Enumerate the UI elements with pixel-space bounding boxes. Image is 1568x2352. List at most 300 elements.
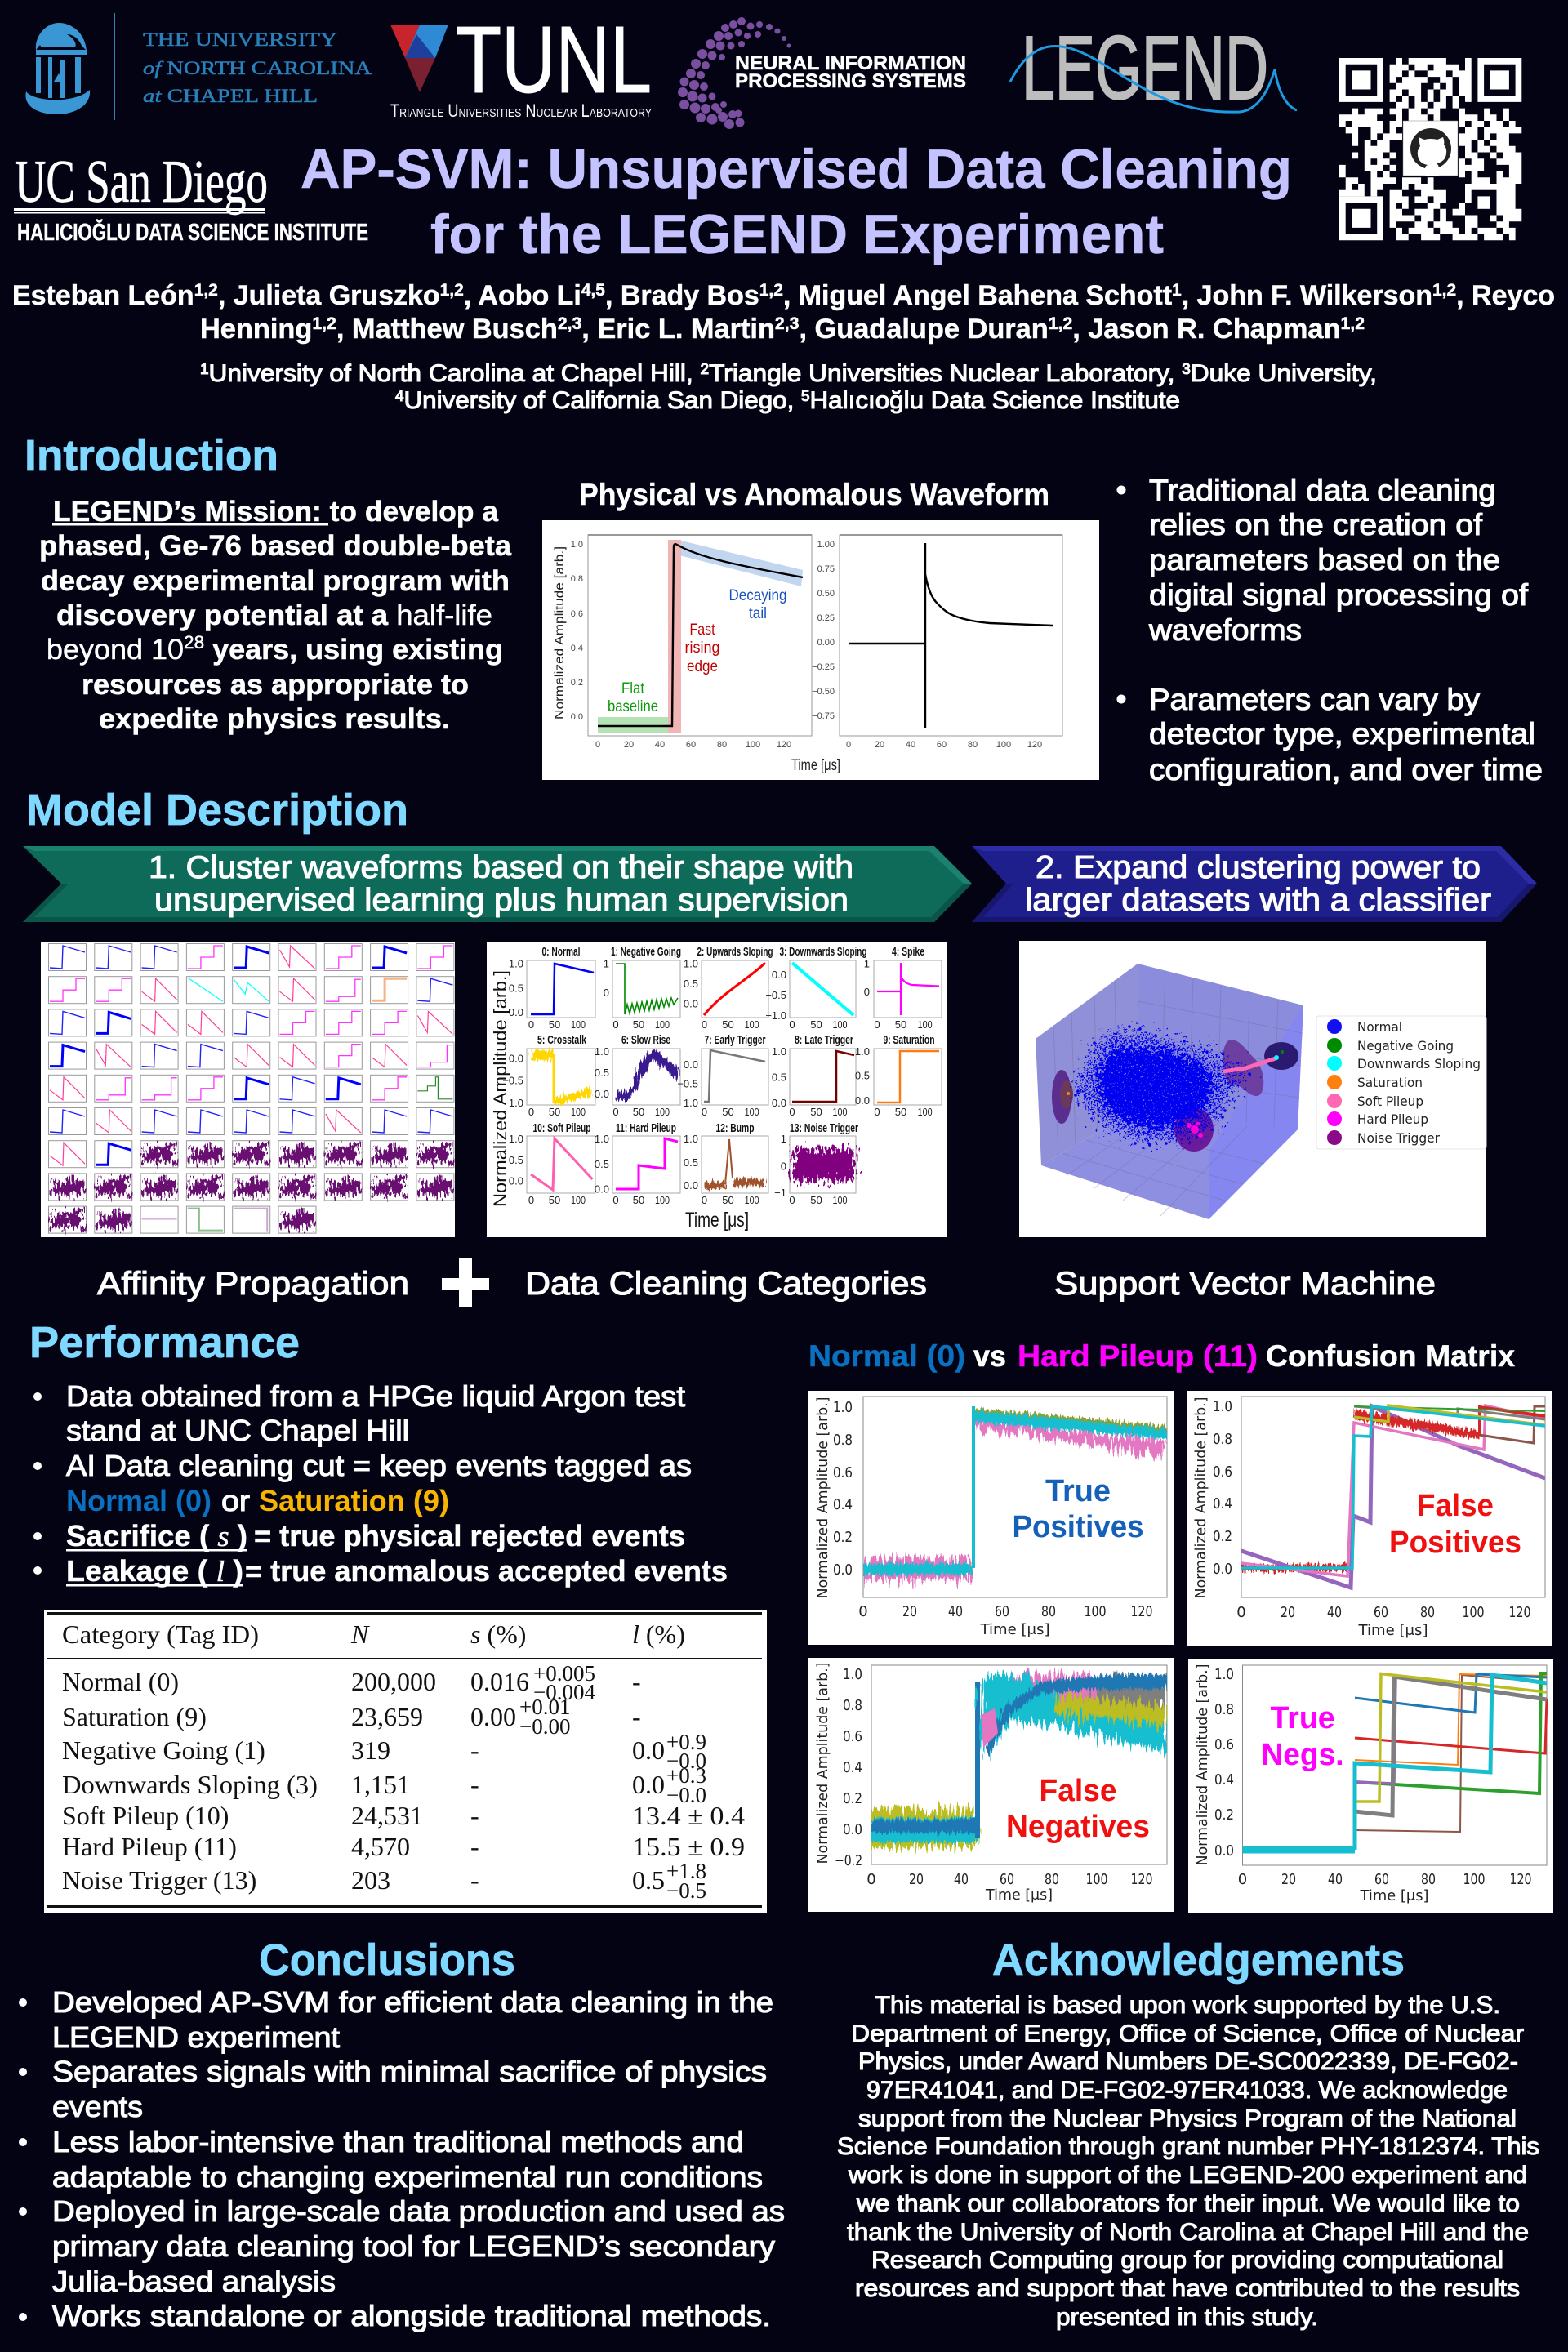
plot: physical waveform: 80	[717, 740, 727, 750]
plot: anomalous waveform	[812, 534, 1062, 750]
ribbon 1: cluster waveforms: 1. Cluster waveforms based on their shape with	[149, 850, 853, 885]
panel: data cleaning categories: 0.0	[684, 1179, 698, 1192]
plot: anomalous waveform: 0.75	[817, 564, 835, 574]
category titles	[532, 945, 934, 1135]
ribbon 1: cluster waveforms: unsupervised learning plus human supervision	[154, 883, 849, 918]
category tick labels: 100	[833, 1106, 848, 1118]
heading: Introduction: Introduction	[24, 431, 278, 480]
category titles: 8: Late Trigger	[795, 1033, 853, 1047]
category tick labels: 100	[745, 1106, 760, 1118]
panel: data cleaning categories: 1.0	[595, 1045, 609, 1058]
3D box	[1036, 964, 1303, 1219]
panel: data cleaning categories: 0.0	[855, 1094, 870, 1107]
axis labels: 100	[1463, 1871, 1485, 1888]
panel: data cleaning categories: 0.0	[509, 1052, 523, 1065]
axis labels: 0.4	[1214, 1771, 1234, 1788]
axis labels: −0.2	[835, 1852, 862, 1869]
category tick labels	[528, 1018, 933, 1206]
logo: LEGEND: LEGEND	[1022, 18, 1268, 118]
authors: , Matthew Busch	[336, 314, 558, 345]
scatter: normal events	[1074, 1025, 1251, 1147]
category titles: 9: Saturation	[884, 1033, 934, 1047]
category tick labels: 0	[702, 1106, 707, 1118]
text block: acknowledgements: presented in this study.	[1056, 2304, 1318, 2331]
scatter: pileup events	[1067, 1050, 1284, 1138]
authors: , Julieta Gruszko	[218, 280, 440, 311]
plot: physical waveform: Fast	[689, 621, 715, 639]
table rows: -	[470, 1832, 479, 1861]
axis labels: 1.0	[833, 1399, 853, 1416]
affiliations: Triangle Universities Nuclear Laboratory,	[709, 360, 1182, 387]
text block: LEGEND's Mission: years, using existing	[204, 634, 503, 666]
category titles: 13: Noise Trigger	[790, 1121, 858, 1135]
bullets: performance definitions: Normal (0)	[66, 1484, 212, 1517]
category tick labels: 0	[528, 1106, 534, 1118]
axis labels: 0	[866, 1871, 876, 1888]
axis labels: 0.8	[1213, 1431, 1232, 1448]
table rows: −0.004	[533, 1680, 595, 1704]
axis labels: 100	[1462, 1604, 1485, 1621]
category tick labels: 100	[918, 1106, 933, 1118]
plot: anomalous waveform: 40	[906, 740, 915, 750]
category tick labels: 0	[789, 1194, 795, 1206]
panel: data cleaning categories: 0.5	[595, 1067, 609, 1079]
category titles: 1: Negative Going	[611, 945, 681, 959]
authors: 1,2	[1341, 314, 1365, 333]
legend: Downwards Sloping	[1357, 1056, 1481, 1071]
plot: anomalous waveform: −0.50	[812, 687, 835, 697]
title	[301, 138, 1292, 265]
plot: physical waveform: 0.6	[571, 609, 583, 619]
category tick labels: 50	[810, 1194, 822, 1206]
category tick labels: 50	[895, 1018, 906, 1031]
confusion matrix heading: Hard Pileup (11)	[1018, 1339, 1258, 1373]
axis labels	[814, 1663, 1153, 1904]
panel: data cleaning categories: 1	[864, 958, 870, 970]
category tick labels: 100	[918, 1018, 933, 1031]
text block: acknowledgements: support from the Nuclear Physics Program of the National	[858, 2105, 1517, 2132]
text block: LEGEND's Mission: 28	[184, 632, 204, 653]
axis labels: 40	[948, 1603, 963, 1620]
table rows: 23,659	[351, 1702, 423, 1731]
authors: 1	[1172, 281, 1182, 300]
axis labels: 80	[1045, 1871, 1059, 1888]
panel: data cleaning categories: 0	[781, 1160, 786, 1173]
bullets: conclusions: LEGEND experiment	[52, 2020, 340, 2054]
axis labels: 1.0	[1213, 1398, 1232, 1415]
affiliations: 5	[801, 388, 810, 404]
panel: data cleaning categories: −0.5	[502, 1075, 523, 1087]
legend: Soft Pileup	[1357, 1094, 1423, 1109]
affiliations: 2	[701, 361, 709, 377]
axis labels	[1194, 1664, 1532, 1904]
table rows: +0.01	[519, 1695, 570, 1719]
bullets: traditional data cleaning: Traditional data cleaning	[1149, 474, 1496, 507]
authors: , Eric L. Martin	[581, 314, 775, 345]
category tick labels: 50	[549, 1018, 560, 1031]
axis labels: 0	[858, 1603, 868, 1620]
axis labels: Normalized Amplitude [arb.]	[814, 1663, 831, 1864]
category tick labels: 100	[655, 1194, 670, 1206]
table rows: 0.0	[632, 1735, 665, 1765]
axis labels: 20	[909, 1871, 924, 1888]
authors: , John F. Wilkerson	[1182, 280, 1432, 311]
category tick labels: 0	[612, 1106, 619, 1118]
panel: data cleaning categories: 0.5	[509, 982, 523, 994]
QR code with GitHub logo	[1339, 58, 1521, 240]
axis labels: 60	[1374, 1604, 1388, 1621]
caption: Support Vector Machine: Support Vector Machine	[1054, 1266, 1436, 1302]
bullets: conclusions: Developed AP-SVM for efficient data cleaning in the	[52, 1985, 773, 2019]
bullets: conclusions: Less labor-intensive than traditional methods and	[52, 2125, 744, 2158]
affiliations: University of California San Diego,	[403, 387, 801, 414]
category tick labels: 50	[633, 1018, 644, 1031]
plot frames	[527, 960, 942, 1193]
category tick labels: 100	[655, 1018, 670, 1031]
category tick labels: 50	[722, 1106, 734, 1118]
axis labels: 120	[1130, 1603, 1153, 1620]
table rows: Negative Going (1)	[62, 1735, 265, 1765]
title: AP-SVM: Unsupervised Data Cleaning	[301, 138, 1292, 200]
table rows: 203	[351, 1865, 390, 1895]
bullets: performance definitions: Saturation (9)	[259, 1484, 449, 1517]
panel: false positives: Positives	[1389, 1526, 1521, 1560]
category tick labels: 50	[549, 1194, 560, 1206]
bullets: traditional data cleaning: parameters based on the	[1149, 543, 1500, 577]
plot: physical waveform: 0	[595, 740, 600, 750]
axis labels	[1192, 1396, 1530, 1639]
panel: data cleaning categories: 0.0	[509, 1175, 523, 1187]
plot: anomalous waveform: 0.50	[817, 589, 835, 599]
category titles: 6: Slow Rise	[621, 1033, 670, 1047]
axis labels: 0.8	[843, 1697, 862, 1714]
authors	[12, 280, 1555, 345]
confusion matrix heading	[808, 1339, 1515, 1373]
legend: Saturation	[1357, 1075, 1423, 1090]
confusion matrix heading: Confusion Matrix	[1266, 1339, 1515, 1373]
chart: physical and anomalous waveforms: Time [μs]	[791, 757, 840, 774]
authors: , Jason R. Chapman	[1072, 314, 1341, 345]
table rows: +0.9	[666, 1730, 706, 1754]
panel: data cleaning categories: 0.0	[684, 1058, 698, 1071]
bullets: performance definitions: AI Data cleaning cut = keep events tagged as	[66, 1449, 692, 1482]
axis labels: 60	[995, 1603, 1009, 1620]
axis labels: 20	[902, 1603, 917, 1620]
affiliations: 3	[1182, 361, 1191, 377]
logo: Neural Information Processing Systems: PROCESSING SYSTEMS	[735, 70, 966, 92]
panel: data cleaning categories: 1.0	[684, 1133, 698, 1145]
panel: true positives: True	[1045, 1474, 1111, 1508]
table rows: Soft Pileup (10)	[62, 1801, 229, 1830]
axis labels: 0.2	[833, 1529, 853, 1546]
category tick labels: 50	[633, 1106, 644, 1118]
text block: acknowledgements: resources and support that have contributed to the results	[855, 2275, 1520, 2302]
axis labels: 0.0	[833, 1561, 853, 1579]
bullets: conclusions: Deployed in large-scale data production and used as	[52, 2194, 785, 2228]
plot: physical waveform: rising	[684, 639, 720, 657]
waveform traces	[1241, 1405, 1545, 1588]
table rows: 0.0	[632, 1770, 665, 1799]
panel: false negatives	[808, 1658, 1174, 1912]
axis labels: 100	[1085, 1603, 1106, 1620]
category tick labels: 50	[722, 1194, 734, 1206]
results table	[44, 1610, 767, 1913]
axis labels: 0.8	[1214, 1701, 1234, 1718]
plot: physical waveform: edge	[687, 658, 718, 675]
axis labels: 40	[1328, 1871, 1343, 1888]
panel: affinity propagation waveform grid	[41, 942, 455, 1237]
logo: TUNL: Triangle Universities Nuclear Laboratory	[390, 100, 652, 121]
axis labels: 0.0	[1214, 1842, 1234, 1860]
table rows: 24,531	[351, 1801, 423, 1830]
authors: 2,3	[558, 314, 581, 333]
panel: data cleaning categories: 1.0	[684, 958, 698, 970]
panel: data cleaning categories: 1.0	[595, 1133, 609, 1145]
title: for the LEGEND Experiment	[430, 203, 1164, 265]
axis labels: 0.2	[1213, 1528, 1232, 1545]
table rows: Saturation (9)	[62, 1702, 207, 1731]
authors: , Miguel Angel Bahena Schott	[783, 280, 1172, 311]
authors: 1,2	[440, 281, 464, 300]
panel: true negatives: True	[1271, 1701, 1334, 1735]
text block: acknowledgements: work is done in support of the LEGEND-200 experiment and	[848, 2162, 1527, 2189]
category titles: 12: Bump	[715, 1121, 755, 1135]
bullets: conclusions: adaptable to changing experimental run conditions	[52, 2160, 763, 2194]
authors: 1,2	[194, 281, 218, 300]
category tick labels: 100	[833, 1018, 848, 1031]
axis labels: 0	[1238, 1871, 1247, 1888]
axis labels: 0.4	[843, 1759, 862, 1776]
table header: l (%)	[632, 1619, 685, 1649]
logo: University of North Carolina: THE UNIVERSITY	[143, 29, 337, 50]
panel: data cleaning categories: 1	[781, 1133, 786, 1145]
category titles: 5: Crosstalk	[537, 1033, 586, 1047]
affiliations: Halıcıoğlu Data Science Institute	[810, 387, 1180, 414]
logo: TUNL: TUNL	[456, 7, 652, 113]
table rows: Noise Trigger (13)	[62, 1865, 256, 1895]
bullets: performance definitions	[33, 1379, 728, 1588]
affiliations: Duke University,	[1191, 360, 1377, 387]
plot: anomalous waveform: 1.00	[817, 540, 835, 550]
panel: data cleaning categories: 1.0	[509, 1133, 523, 1145]
bullets: traditional data cleaning: Parameters can vary by	[1149, 683, 1481, 716]
ribbon 2: expand clustering: larger datasets with a classifier	[1025, 883, 1491, 918]
table rows: 4,570	[351, 1832, 410, 1861]
panel: data cleaning categories: −0.5	[677, 1078, 698, 1089]
panel: data cleaning categories: 0.5	[684, 1156, 698, 1169]
panel: data cleaning categories: 0.5	[595, 1158, 609, 1170]
panel: data cleaning categories: 0.0	[595, 1088, 609, 1100]
authors: Henning	[200, 314, 311, 345]
axis labels: 0.6	[833, 1464, 853, 1481]
authors: 1,2	[760, 281, 783, 300]
panel: false negatives: Negatives	[1006, 1810, 1150, 1844]
confusion matrix heading: Normal (0)	[808, 1339, 965, 1373]
axis labels: Time [μs]	[1360, 1887, 1429, 1904]
panel: data cleaning categories: 0.5	[855, 1070, 870, 1082]
caption: Affinity Propagation: Affinity Propagation	[97, 1266, 409, 1302]
plot: anomalous waveform: 0.00	[817, 638, 835, 648]
panel: data cleaning categories: Normalized Amplitude [arb.]	[490, 970, 510, 1207]
category tick labels: 50	[810, 1018, 822, 1031]
text block: acknowledgements	[837, 1992, 1539, 2331]
bullets: traditional data cleaning: detector type, experimental	[1149, 717, 1535, 751]
category tick labels: 50	[633, 1194, 644, 1206]
category tick labels: 100	[571, 1018, 586, 1031]
category tick labels: 0	[702, 1018, 707, 1031]
ribbon 2: expand clustering	[972, 846, 1537, 922]
plot: physical waveform: 120	[777, 740, 791, 750]
table rows: 15.5 ± 0.9	[632, 1832, 745, 1861]
panel: data cleaning categories: 0.0	[509, 1006, 523, 1018]
table rows: -	[470, 1770, 479, 1799]
category titles: 3: Downwards Sloping	[779, 945, 867, 959]
axis labels: 0.2	[843, 1790, 862, 1807]
category titles: 11: Hard Pileup	[616, 1121, 676, 1135]
category titles: 4: Spike	[892, 945, 924, 959]
table rows: -	[470, 1735, 479, 1765]
text block: LEGEND's Mission: discovery potential at a half-life	[56, 599, 492, 631]
logo: UC San Diego Halicioglu Data Science Institute: UC San Diego	[15, 149, 268, 216]
plot: anomalous waveform: 80	[968, 740, 978, 750]
affiliations: 1	[200, 361, 209, 377]
text block: LEGEND's Mission: beyond 10	[47, 634, 184, 666]
heading: Acknowledgements: Acknowledgements	[992, 1936, 1405, 1984]
affiliations: University of North Carolina at Chapel Hill,	[209, 360, 701, 387]
bullets: conclusions: Julia-based analysis	[52, 2265, 336, 2298]
category waveforms	[531, 963, 939, 1190]
panel: data cleaning categories: 1.0	[509, 958, 523, 970]
authors: , Reyco	[1456, 280, 1555, 311]
axis labels: Time [μs]	[1357, 1622, 1428, 1639]
panel: data cleaning categories: −1.0	[677, 1097, 698, 1109]
category tick labels: 0	[874, 1018, 880, 1031]
category tick labels: 50	[810, 1106, 822, 1118]
table header: N	[350, 1619, 370, 1649]
logo: UC San Diego Halicioglu Data Science Institute: HALICIOĞLU DATA SCIENCE INSTITUTE	[17, 218, 368, 246]
axis labels: 60	[1000, 1871, 1014, 1888]
authors: 1,2	[1432, 281, 1456, 300]
category tick labels: 50	[549, 1106, 560, 1118]
text block: LEGEND's Mission: resources as appropriate to	[82, 669, 469, 701]
ribbon 1: cluster waveforms	[23, 846, 972, 922]
axis labels: 0.8	[833, 1432, 853, 1449]
category tick labels: 0	[612, 1194, 619, 1206]
bullets: conclusions	[19, 1985, 785, 2332]
axis labels: 0.0	[843, 1821, 862, 1838]
table rows: Downwards Sloping (3)	[62, 1770, 318, 1799]
axis labels: 120	[1509, 1604, 1530, 1621]
text block: acknowledgements: thank the University of North Carolina at Chapel Hill and the	[847, 2219, 1529, 2246]
panel: data cleaning categories: 0.5	[509, 1154, 523, 1166]
text block: LEGEND's Mission: decay experimental program with	[41, 565, 510, 597]
category titles: 2: Upwards Sloping	[697, 945, 773, 959]
category titles: 10: Soft Pileup	[532, 1121, 591, 1135]
axis labels: 80	[1041, 1603, 1056, 1620]
table rows: 0.00	[470, 1702, 516, 1731]
table rows: 0.5	[632, 1865, 665, 1895]
bullets: conclusions: Works standalone or alongside traditional methods.	[52, 2299, 771, 2332]
bullets: traditional data cleaning: configuration, and over time	[1149, 753, 1543, 786]
panel: data cleaning categories: −0.5	[765, 989, 786, 1001]
chart heading: Physical vs Anomalous Waveform: Physical vs Anomalous Waveform	[579, 478, 1049, 511]
bullets: conclusions: Separates signals with minimal sacrifice of physics	[52, 2055, 767, 2088]
panel: data cleaning categories: 0.0	[684, 998, 698, 1010]
plot: physical waveform: 20	[624, 740, 634, 750]
table rows: −0.0	[666, 1748, 706, 1773]
axis labels: 80	[1420, 1604, 1435, 1621]
decision boundary surfaces	[1052, 1040, 1298, 1152]
category tick labels: 0	[528, 1194, 534, 1206]
bullets: performance definitions: Sacrifice ( s )	[66, 1519, 247, 1552]
category tick labels: 50	[895, 1106, 906, 1118]
panel: data cleaning categories: −1	[774, 1187, 786, 1199]
axis labels: 0.6	[843, 1728, 862, 1745]
text block: LEGEND's Mission	[39, 496, 512, 735]
axis labels: 0.4	[833, 1496, 853, 1513]
authors: , Aobo Li	[464, 280, 581, 311]
table rows: -	[632, 1667, 641, 1696]
category tick labels: 100	[571, 1106, 586, 1118]
table rows: 319	[351, 1735, 390, 1765]
authors: 1,2	[312, 314, 336, 333]
plot: physical waveform	[571, 534, 812, 750]
chart: physical and anomalous waveforms	[542, 520, 1099, 780]
table header: Category (Tag ID)	[62, 1619, 259, 1649]
plot: anomalous waveform: 100	[996, 740, 1011, 750]
authors: Esteban León	[12, 280, 194, 311]
plot: anomalous waveform: 120	[1027, 740, 1042, 750]
axis labels: 1.0	[1214, 1666, 1234, 1683]
axis labels: Time [μs]	[979, 1621, 1050, 1638]
table rows: +0.005	[533, 1661, 595, 1686]
axis labels	[814, 1396, 1153, 1638]
logo: UC San Diego Halicioglu Data Science Institute	[14, 149, 368, 246]
category tick labels: 0	[789, 1018, 795, 1031]
axis labels: Normalized Amplitude [arb.]	[814, 1396, 831, 1599]
table header	[62, 1619, 685, 1649]
axis labels: Time [μs]	[985, 1886, 1053, 1904]
plot: anomalous waveform: 0	[846, 740, 851, 750]
category tick labels: 0	[612, 1018, 619, 1031]
plot: physical waveform: baseline	[608, 698, 658, 715]
table rows: −0.00	[519, 1714, 570, 1739]
logo: University of North Carolina	[25, 13, 372, 120]
bullets: performance definitions: Data obtained from a HPGe liquid Argon test	[66, 1379, 685, 1413]
category titles: 7: Early Trigger	[704, 1033, 766, 1047]
heading: Performance: Performance	[29, 1318, 300, 1367]
plot: anomalous waveform: 20	[875, 740, 884, 750]
panel: data cleaning categories: 0.0	[772, 969, 786, 981]
icon: plus sign	[442, 1258, 489, 1307]
ribbon 2: expand clustering: 2. Expand clustering power to	[1036, 850, 1481, 885]
plot: physical waveform: tail	[749, 605, 767, 622]
legend: Noise Trigger	[1357, 1130, 1440, 1146]
bullets: traditional data cleaning	[1117, 474, 1543, 786]
panel: data cleaning categories: 0.5	[772, 1071, 786, 1083]
axis labels: Normalized Amplitude [arb.]	[1192, 1396, 1209, 1599]
axis labels: 40	[954, 1871, 969, 1888]
plot: physical waveform: 40	[655, 740, 665, 750]
plot: anomalous waveform: 60	[937, 740, 947, 750]
bullets: performance definitions: = true physical rejected events	[254, 1519, 685, 1552]
panel: data cleaning categories: 1	[604, 958, 609, 970]
axis labels: 0.2	[1214, 1806, 1234, 1824]
affiliations: 4	[395, 388, 403, 404]
panel: data cleaning categories: −1.0	[765, 1009, 786, 1022]
panel: false positives	[1187, 1391, 1552, 1646]
waveform bands	[863, 1406, 1167, 1579]
